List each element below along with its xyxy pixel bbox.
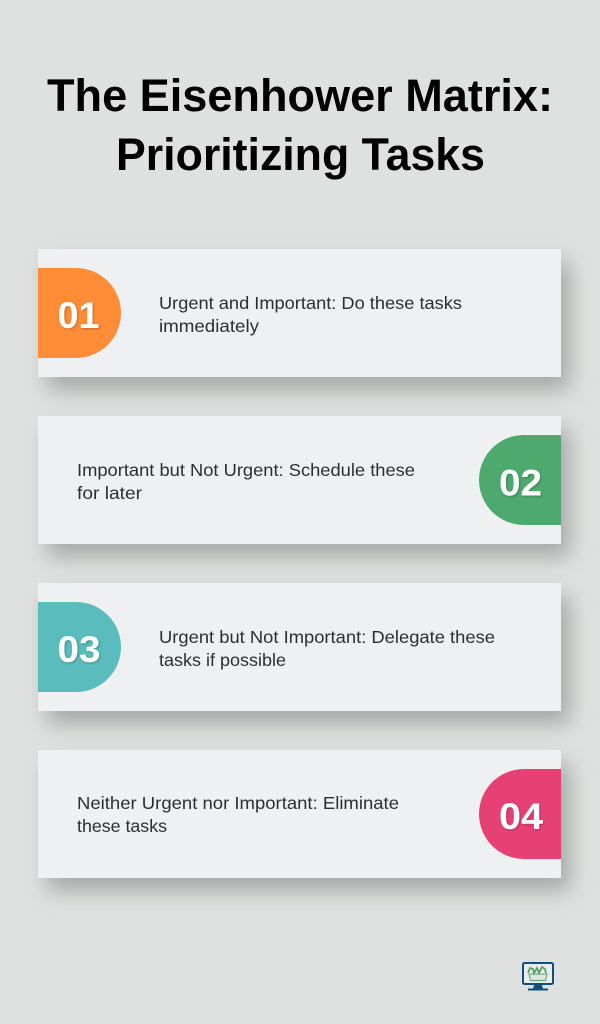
text: step 01 bbox=[159, 293, 462, 336]
badge: 01: 01 bbox=[58, 295, 100, 336]
badge: 04 bbox=[479, 769, 561, 859]
text: step 02 bbox=[77, 460, 415, 503]
text: step 04: these tasks bbox=[77, 816, 167, 836]
badge: 03 bbox=[38, 602, 121, 692]
text: step 04: Neither Urgent nor Important: Eliminate bbox=[77, 793, 399, 813]
text: step 03: Urgent but Not Important: Delegate these bbox=[159, 627, 495, 647]
badge: 03: 03 bbox=[58, 629, 100, 670]
icon: computer monitor logo bbox=[523, 963, 553, 990]
badge: 02: 02 bbox=[499, 462, 542, 504]
title: Prioritizing Tasks bbox=[116, 129, 485, 180]
text: step 01: immediately bbox=[159, 316, 259, 336]
panel: step 04 bbox=[38, 750, 561, 878]
panel: step 02 bbox=[38, 416, 561, 544]
panel: step 03 bbox=[38, 583, 561, 711]
badge: 02 bbox=[479, 435, 561, 525]
text: step 03: tasks if possible bbox=[159, 650, 286, 670]
badge: 01 bbox=[38, 268, 121, 358]
panel: step 01 bbox=[38, 249, 561, 377]
text: step 04 bbox=[77, 793, 399, 836]
text: step 01: Urgent and Important: Do these tasks bbox=[159, 293, 462, 313]
badge: 04: 04 bbox=[499, 796, 543, 837]
title: The Eisenhower Matrix: bbox=[47, 70, 553, 121]
text: step 03 bbox=[159, 627, 495, 670]
text: step 02: Important but Not Urgent: Schedule these bbox=[77, 460, 415, 480]
text: step 02: for later bbox=[77, 483, 142, 503]
title bbox=[47, 70, 553, 180]
